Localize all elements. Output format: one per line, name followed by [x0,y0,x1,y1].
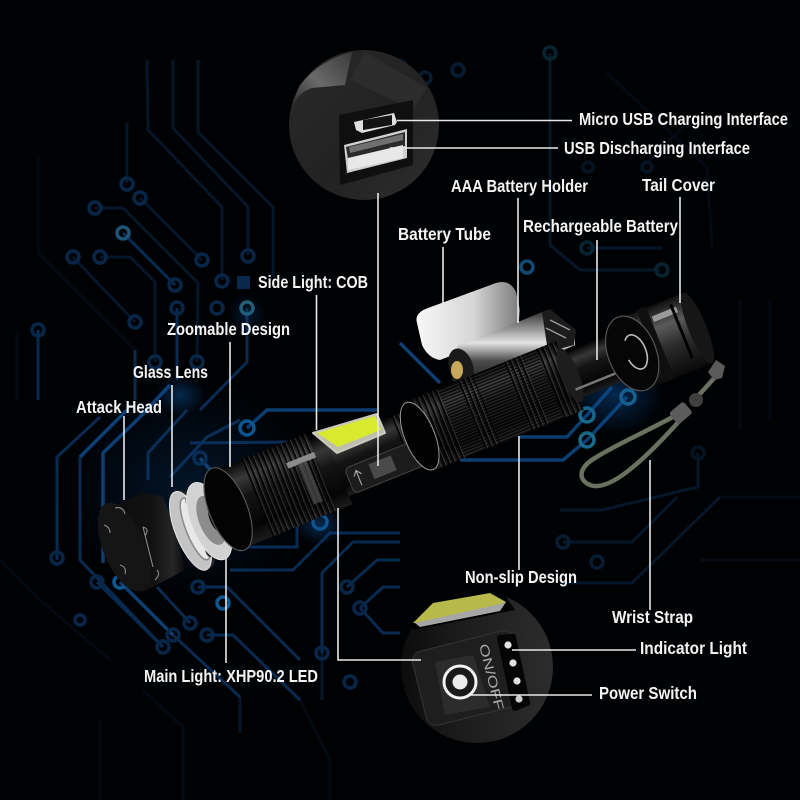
label: Indicator Light: Indicator Light [640,638,747,658]
label: USB Discharging Interface: USB Discharging Interface [564,138,750,158]
threaded zoom tube [194,430,340,557]
grip sleeve [392,341,584,476]
attack head [87,492,185,598]
label: Side Light COB: Side Light: COB [258,272,368,292]
inset: power switch and indicator lights [400,588,553,743]
flashlight assembly [87,277,721,598]
label: Wrist Strap: Wrist Strap [612,607,693,627]
label: Rechargeable Battery: Rechargeable Battery [523,216,678,236]
COB side light [313,414,385,453]
USB-A port [344,129,407,173]
label: Zoomable Design: Zoomable Design [167,319,290,339]
indicator LEDs [500,637,527,708]
label: AAA Battery Holder: AAA Battery Holder [451,176,588,196]
leader lines [124,120,680,695]
ON/OFF text: ON/OFF [476,642,507,712]
inset: USB ports [289,50,439,200]
label: Main Light XHP90.2 LED: Main Light: XHP90.2 LED [144,666,318,686]
main body [309,400,436,510]
metal washer [177,476,241,566]
label: Attack Head: Attack Head [76,397,162,417]
label: Power Switch: Power Switch [599,683,697,703]
wrist strap [582,360,725,486]
label: Tail Cover: Tail Cover [642,175,715,195]
label: Battery Tube: Battery Tube [398,224,491,244]
inner tube [551,331,623,406]
micro USB port [354,113,397,133]
label: Glass Lens: Glass Lens [133,362,208,382]
glass lens [161,484,225,575]
AAA battery holder [444,309,576,392]
tail cover [595,288,720,399]
battery tube: clear cylinder [416,282,520,360]
power button [444,666,476,698]
label: Non-slip Design: Non-slip Design [465,567,577,587]
